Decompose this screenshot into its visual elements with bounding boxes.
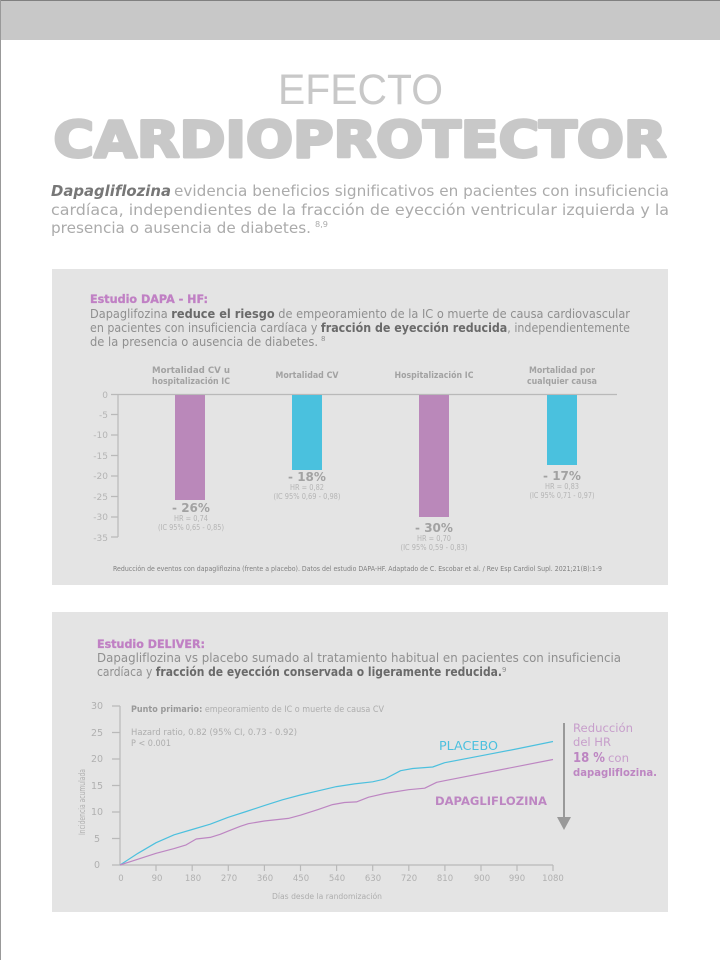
arrow: HR reduction: [557, 723, 571, 830]
x axis values: 630: [365, 874, 381, 884]
y axis values: [91, 701, 103, 871]
column headers: Hospitalización IC: [394, 370, 474, 381]
study description: Dapaglifozina reduce el riesgo de empeoramiento de la IC o muerte de causa cardiovascular: [90, 307, 630, 321]
y axis values: 20: [91, 754, 103, 765]
x axis values: 540: [329, 874, 345, 884]
study description: 9: [502, 666, 506, 674]
title: CARDIOPROTECTOR: [54, 111, 666, 169]
bar chart: -30: [93, 513, 108, 523]
panel: DELIVER: [52, 612, 668, 912]
intro text: 8,9: [315, 220, 328, 229]
study description: en pacientes con insuficiencia cardíaca y fracción de eyección reducida, independientemente: [90, 321, 630, 335]
primary endpoint note: [131, 705, 385, 749]
primary endpoint note: Punto primario: empeoramiento de IC o muerte de causa CV: [131, 705, 385, 715]
callout: HR reduction: con: [608, 751, 629, 765]
y axis values: 0: [94, 860, 100, 871]
y axis values: 15: [91, 781, 103, 792]
bar label: -17%: (IC 95% 0,71 - 0,97): [530, 491, 594, 500]
study description: de la presencia o ausencia de diabetes.: [90, 335, 318, 349]
label: placebo: PLACEBO: [439, 738, 498, 753]
intro text: presencia o ausencia de diabetes.: [51, 219, 311, 237]
bar label: -18%: (IC 95% 0,69 - 0,98): [274, 492, 340, 501]
intro text: [51, 182, 669, 237]
heading: Estudio DAPA-HF: Estudio DAPA - HF:: [90, 292, 208, 306]
line chart: [78, 701, 564, 901]
bar chart: -5: [99, 411, 108, 421]
study description: Dapagliflozina vs placebo sumado al tratamiento habitual en pacientes con insuficiencia: [97, 651, 621, 665]
y axis title: Incidencia acumulada: [78, 769, 88, 835]
study description: 8: [321, 335, 325, 343]
bar label: -26%: - 26%: [172, 501, 210, 515]
bar label: -17%: - 17%: [543, 469, 581, 483]
y axis values: 10: [91, 807, 103, 818]
bar chart: -25: [93, 493, 108, 503]
bar label: -26%: HR = 0,74: [174, 514, 208, 523]
bar label: -18%: - 18%: [288, 470, 326, 484]
primary endpoint note: Hazard ratio, 0.82 (95% CI, 0.73 - 0.92): [131, 728, 297, 738]
heading: Estudio DELIVER: Estudio DELIVER:: [97, 637, 205, 651]
x axis values: 90: [152, 874, 162, 884]
study description: [97, 651, 621, 679]
bar label: -30%: - 30%: [415, 521, 453, 535]
y axis values: 30: [91, 701, 103, 712]
bar chart: 0: [102, 391, 108, 401]
callout: HR reduction: Reducción: [573, 721, 633, 735]
callout: HR reduction: 18 %: [573, 750, 605, 766]
intro text: Dapagliflozina: [51, 182, 171, 200]
column headers: hospitalización IC: [152, 376, 230, 387]
y axis values: 25: [91, 728, 103, 739]
column headers: Mortalidad CV: [276, 371, 339, 381]
y axis values: 5: [94, 834, 100, 845]
bar label: -26%: (IC 95% 0,65 - 0,85): [158, 523, 224, 532]
primary endpoint note: P < 0.001: [131, 739, 171, 749]
label: dapagliflozina: DAPAGLIFLOZINA: [435, 794, 547, 808]
study description: cardíaca y fracción de eyección conservada o ligeramente reducida.: [97, 665, 502, 679]
bar label: -18%: [274, 470, 340, 501]
bar label: -30%: HR = 0,70: [417, 534, 451, 543]
x axis values: 1080: [542, 874, 564, 884]
intro text: evidencia beneficios significativos en pacientes con insuficiencia: [174, 182, 669, 200]
intro text: cardíaca, independientes de la fracción de eyección ventricular izquierda y la: [51, 201, 669, 219]
bar chart: -10: [93, 431, 108, 441]
callout: HR reduction: del HR: [573, 735, 611, 749]
bar chart: -15: [93, 452, 108, 462]
callout: HR reduction: dapagliflozina.: [573, 766, 657, 779]
x axis values: [118, 874, 564, 884]
x axis values: 810: [437, 874, 453, 884]
x axis values: 900: [474, 874, 490, 884]
column headers: cualquier causa: [527, 377, 597, 387]
x axis title: Días desde la randomización: [272, 891, 382, 901]
x axis values: 720: [401, 874, 417, 884]
bar chart: [93, 391, 617, 552]
bar label: -17%: HR = 0,83: [545, 482, 579, 491]
dapagliflozin line: [120, 760, 553, 865]
bar label: -26%: [158, 501, 224, 532]
bar label: -30%: [400, 521, 468, 552]
bar chart: -20: [93, 472, 108, 482]
x axis values: 990: [509, 874, 525, 884]
x axis values: 360: [257, 874, 273, 884]
callout: HR reduction: [573, 721, 657, 779]
column headers: Mortalidad por: [529, 366, 596, 376]
x axis values: 270: [221, 874, 237, 884]
study description: [90, 307, 630, 349]
bar label: -18%: HR = 0,82: [290, 483, 324, 492]
x axis values: 180: [185, 874, 201, 884]
title: EFECTO: [278, 66, 443, 114]
bar chart: -35: [93, 534, 108, 544]
bar label: -30%: (IC 95% 0,59 - 0,83): [400, 543, 468, 552]
column headers: Mortalidad CV u: [152, 366, 230, 376]
placebo line: [120, 742, 553, 865]
title: [54, 66, 666, 169]
column headers: [152, 366, 597, 387]
x axis values: 0: [118, 874, 124, 884]
bar label: -17%: [530, 469, 594, 500]
x axis values: 450: [293, 874, 309, 884]
source note: Reducción de eventos con dapagliflozina (frente a placebo). Datos del estudio DAPA-HF. Adaptado de C. Escobar et al. / Rev Esp Cardiol Supl. 2021;21(B):1-9: [113, 565, 602, 573]
panel: DAPA-HF: [52, 269, 668, 585]
